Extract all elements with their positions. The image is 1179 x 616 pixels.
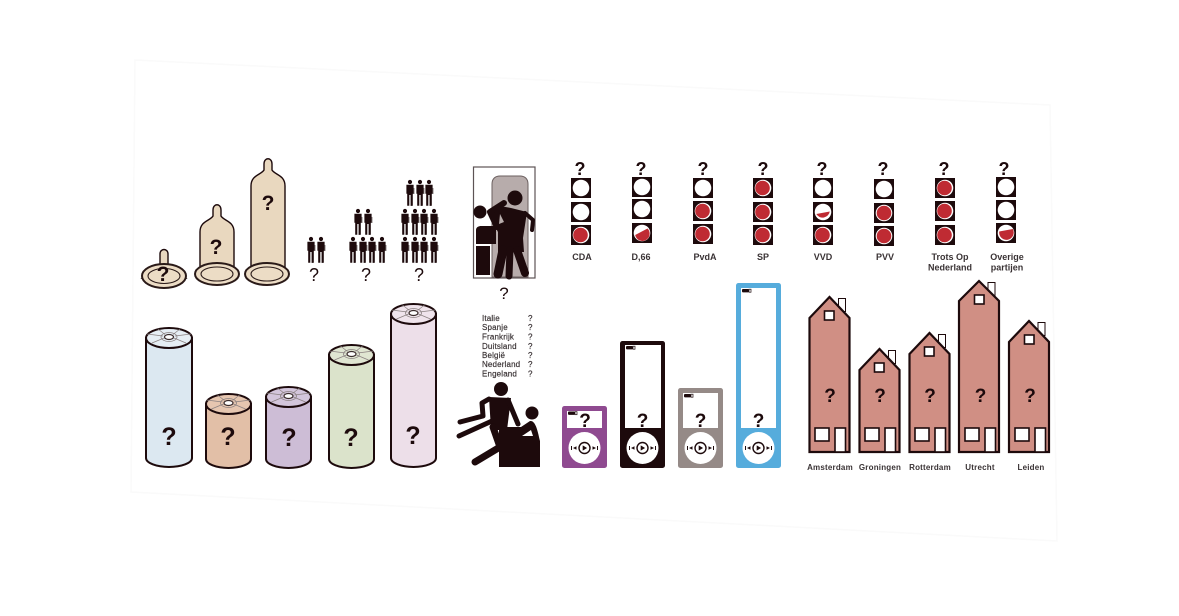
party: D,66: D,66	[631, 252, 651, 262]
panel: figures at door	[474, 167, 535, 278]
country list: Italie	[482, 314, 500, 323]
country list: Spanje	[482, 323, 508, 332]
condom medium: ?	[210, 236, 222, 259]
people group medium: ?	[361, 265, 371, 285]
country list: Frankrijk	[482, 332, 515, 342]
party: CDA	[571, 159, 592, 262]
house: Groningen: Groningen	[859, 463, 901, 472]
cylinder pink	[391, 304, 436, 467]
player blue: ?	[753, 411, 764, 432]
party: PVV	[874, 159, 894, 262]
player black	[620, 341, 665, 468]
party: Trots Op Nederland: Nederland	[928, 262, 972, 272]
party: SP: SP	[757, 252, 769, 262]
cylinder green	[329, 345, 374, 468]
condom small: ?	[157, 263, 169, 286]
party: Overige partijen: ?	[998, 159, 1010, 179]
cylinder orange: ?	[220, 423, 236, 451]
party: SP	[753, 159, 773, 262]
party: SP: ?	[758, 159, 768, 179]
party: PvdA	[693, 159, 717, 262]
country list: ?	[528, 323, 533, 332]
party: Trots Op Nederland	[928, 159, 972, 272]
party: PVV: ?	[878, 159, 888, 179]
house: Groningen	[859, 349, 901, 472]
condom large: ?	[262, 192, 274, 215]
question mark door: ?	[499, 284, 509, 303]
cylinder purple: ?	[281, 424, 297, 452]
party: CDA: CDA	[572, 252, 592, 262]
player blue	[736, 283, 781, 468]
house: Amsterdam	[807, 297, 853, 472]
cylinder purple	[266, 387, 311, 468]
house: Leiden: ?	[1024, 386, 1036, 407]
house: Amsterdam: ?	[824, 386, 836, 407]
house: Leiden: Leiden	[1018, 463, 1044, 472]
player grey: ?	[695, 411, 706, 432]
country list: Duitsland	[482, 342, 517, 351]
player purple: ?	[579, 411, 591, 432]
condom large	[245, 159, 289, 285]
people group large: ?	[414, 265, 424, 285]
house: Utrecht: Utrecht	[965, 463, 995, 472]
tilted paper sheet	[131, 60, 1057, 541]
grey door	[492, 176, 528, 277]
people group small: ?	[309, 265, 319, 285]
country list: België	[482, 351, 506, 360]
party: Overige partijen	[990, 159, 1024, 272]
country list: ?	[528, 370, 533, 378]
party: VVD	[813, 159, 833, 262]
house: Rotterdam: Rotterdam	[909, 463, 951, 472]
panel: people groups	[307, 180, 438, 285]
cylinder pink: ?	[405, 422, 421, 450]
cylinder blue	[146, 328, 192, 467]
house: Amsterdam: Amsterdam	[807, 463, 853, 472]
cylinder orange	[206, 394, 251, 468]
party: CDA: ?	[574, 159, 586, 179]
party: Trots Op Nederland: ?	[938, 159, 950, 179]
house: Rotterdam: ?	[924, 386, 936, 407]
player black: ?	[637, 411, 648, 432]
player grey	[678, 388, 723, 468]
panel: party traffic lights	[571, 159, 1024, 272]
house: Utrecht: ?	[975, 386, 986, 407]
panel: cylinders	[146, 304, 436, 468]
party: Overige partijen: partijen	[991, 262, 1023, 272]
party: VVD: ?	[816, 159, 828, 179]
country list: ?	[528, 342, 533, 351]
panel: music players	[562, 283, 781, 468]
standing figure	[489, 190, 533, 276]
leaning figure	[474, 206, 496, 275]
country list: Engeland	[482, 370, 517, 378]
house: Utrecht	[959, 281, 999, 472]
country list: ?	[528, 360, 533, 369]
country list: Nederland	[482, 360, 520, 369]
party: Overige partijen: Overige	[990, 252, 1024, 262]
party: PvdA: PvdA	[693, 252, 717, 262]
party: PvdA: ?	[698, 159, 708, 179]
country list: ?	[528, 332, 533, 342]
country list	[482, 314, 533, 378]
house: Rotterdam	[909, 333, 951, 472]
party: Trots Op Nederland: Trots Op	[931, 252, 969, 262]
cylinder green: ?	[343, 424, 359, 452]
door frame	[474, 167, 535, 278]
cylinder blue: ?	[161, 423, 177, 451]
figures on box	[459, 382, 540, 467]
party: D,66: ?	[636, 159, 646, 179]
condom small	[142, 250, 186, 288]
party: PVV: PVV	[876, 252, 894, 262]
panel: houses	[807, 281, 1049, 472]
house: Leiden	[1009, 321, 1049, 472]
panel: condom bars	[142, 159, 289, 288]
house: Groningen: ?	[874, 386, 886, 407]
player purple	[562, 406, 607, 468]
party: D,66	[631, 159, 652, 262]
country list: ?	[528, 351, 533, 360]
condom medium	[195, 205, 239, 285]
party: VVD: VVD	[814, 252, 833, 262]
country list: ?	[528, 314, 533, 323]
